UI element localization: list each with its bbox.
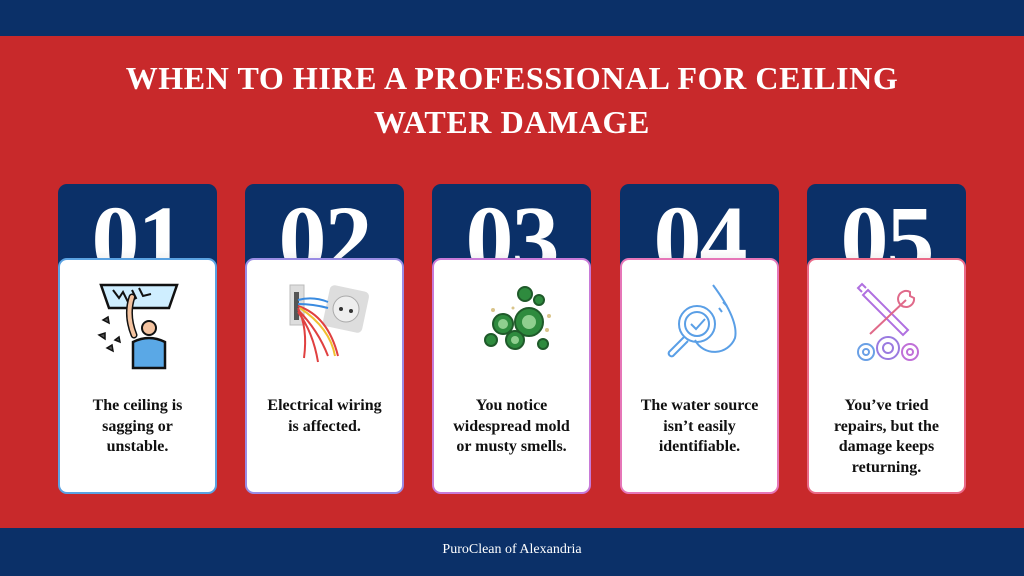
card 04	[620, 258, 779, 494]
text 01: unstable.	[107, 438, 168, 455]
text 05: returning.	[852, 458, 921, 476]
text 02	[267, 397, 382, 434]
footer: PuroClean of Alexandria	[442, 542, 582, 557]
text 04: The water source	[641, 397, 758, 414]
panel: 03	[432, 184, 591, 494]
text 05: You’ve tried	[844, 397, 928, 414]
icon: water drop with magnifier	[668, 284, 736, 358]
text 05: damage keeps	[839, 438, 934, 455]
panel: 01	[58, 184, 217, 494]
panel: 02	[245, 184, 404, 494]
icon: mold	[484, 286, 551, 350]
number tab 04	[620, 184, 779, 274]
text 01: The ceiling is	[93, 397, 182, 414]
text 01	[92, 397, 182, 455]
card 02	[245, 258, 404, 494]
bottom band	[0, 528, 1024, 576]
card 03	[432, 258, 591, 494]
text 04	[641, 397, 758, 455]
title: WHEN TO HIRE A PROFESSIONAL FOR CEILING	[126, 60, 898, 96]
card 05	[807, 258, 966, 494]
text 05	[834, 397, 939, 476]
title: WATER DAMAGE	[374, 104, 650, 140]
text 02: is affected.	[288, 418, 361, 434]
text 04: identifiable.	[659, 438, 740, 455]
text 04: isn’t easily	[663, 418, 736, 434]
number tab 02	[245, 184, 404, 274]
icon: electrical wiring	[290, 284, 369, 362]
text 03: You notice	[476, 397, 547, 414]
icon: tools and gears	[856, 282, 919, 361]
title	[126, 60, 898, 140]
top band	[0, 0, 1024, 36]
panel: 05	[807, 184, 966, 494]
panel: 04	[620, 184, 779, 494]
number tab 03	[432, 184, 591, 274]
text 01: sagging or	[102, 418, 173, 434]
number tab 05	[807, 184, 966, 274]
text 05: repairs, but the	[834, 418, 939, 434]
number tab 01	[58, 184, 217, 274]
text 02: Electrical wiring	[267, 397, 382, 414]
icon: ceiling collapse	[97, 284, 179, 370]
text 03	[453, 397, 570, 455]
text 03: widespread mold	[453, 418, 570, 434]
text 03: or musty smells.	[456, 438, 567, 455]
card 01	[58, 258, 217, 494]
